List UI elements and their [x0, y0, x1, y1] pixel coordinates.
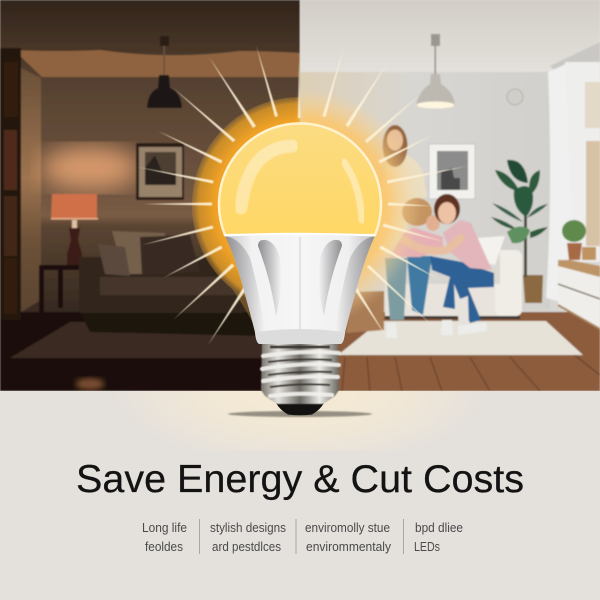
feature 2: ard pestdlces: [212, 540, 281, 554]
collar lower band: [256, 329, 344, 344]
mother jeans: [430, 256, 494, 323]
glass highlight left: [241, 146, 292, 208]
hugging arm: [404, 238, 461, 251]
side table: [39, 265, 81, 316]
glow halo behind bulb: [192, 93, 426, 345]
side wall: [21, 68, 41, 312]
feature 3: enviromolly stue: [305, 521, 390, 535]
panel: bright room, right half: [300, 0, 600, 391]
feature 1: Long life: [142, 521, 187, 535]
wall glow above lamp: [40, 146, 140, 190]
back wall: [41, 77, 300, 317]
pendant lamp: [416, 34, 455, 108]
glass highlight right: [344, 162, 362, 220]
white sofa: [385, 236, 522, 319]
picture frame: [429, 144, 475, 199]
sideboard: [558, 260, 600, 329]
feature 2: [210, 521, 286, 554]
collar: [225, 234, 375, 344]
icon: LED light bulb: [219, 123, 381, 417]
feature 2: stylish designs: [210, 521, 286, 535]
feature 3: envirommentaly: [306, 540, 392, 554]
feature 4: [414, 521, 463, 554]
screw base: [261, 342, 339, 404]
sofa floor shadow: [80, 312, 262, 336]
table lamp: [51, 194, 98, 266]
standing woman: [370, 125, 427, 262]
curtain: [546, 64, 575, 305]
dark sofa: [79, 231, 245, 313]
floor: [300, 312, 600, 391]
pendant lamp: [147, 36, 182, 108]
floor: [0, 312, 300, 391]
floor reflection: [76, 378, 104, 390]
feature 3: [305, 521, 392, 554]
mother head: [434, 194, 460, 224]
child jeans: [385, 258, 407, 320]
ceiling cove light: [14, 50, 300, 77]
rug: [338, 321, 583, 355]
contact tip: [276, 403, 324, 415]
smoke detector: [507, 89, 523, 105]
rug: [10, 322, 262, 358]
child hair: [402, 198, 432, 226]
wicker basket: [346, 291, 384, 333]
legs and shoes: [457, 296, 469, 330]
collar fin left: [258, 240, 281, 316]
centre seam: [300, 237, 301, 331]
mother pink shirt: [443, 220, 492, 270]
back wall: [300, 72, 550, 310]
feature 4: bpd dliee: [415, 521, 463, 535]
collar fin right: [319, 240, 342, 316]
picture frame: [136, 143, 184, 200]
small potted plant: [562, 220, 596, 260]
family on sofa: [385, 194, 494, 338]
feature 1: feoldes: [145, 540, 183, 554]
door: [0, 48, 21, 320]
feature 1: [142, 521, 187, 554]
feature columns: [142, 521, 463, 554]
feature 4: LEDs: [414, 540, 440, 554]
bottom band with warm glow: [0, 391, 600, 600]
bulb glass globe: [219, 123, 381, 235]
window: [565, 62, 600, 262]
floor plant: [491, 160, 548, 303]
bulb shadow: [228, 411, 372, 417]
light rays: [137, 45, 468, 345]
ceiling corner: [550, 42, 600, 80]
child pink top: [390, 227, 443, 257]
collar top rim: [225, 234, 375, 236]
panel: dark room, left half: [0, 0, 300, 391]
title: Save Energy & Cut Costs: [76, 458, 524, 501]
